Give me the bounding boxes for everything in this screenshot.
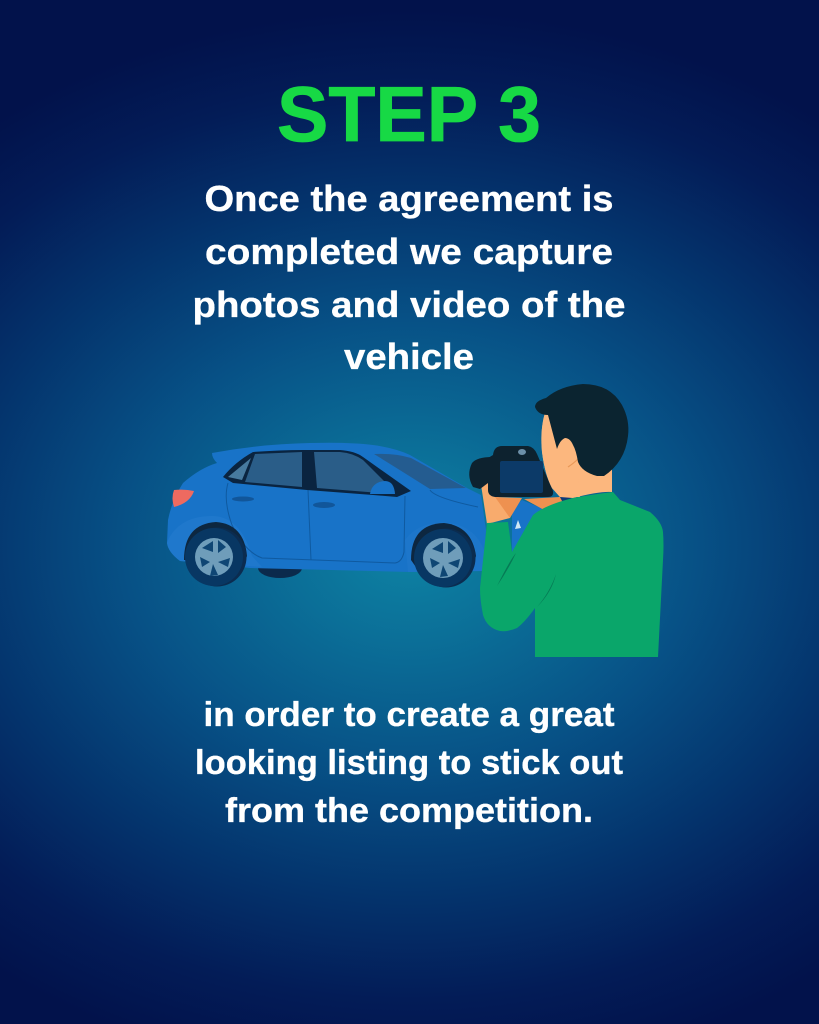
neck shadow: [524, 497, 564, 511]
blue shirt under arm: [512, 500, 546, 552]
rear light: [172, 490, 194, 507]
rear wheel: [184, 522, 247, 586]
title: STEP 3: [277, 70, 541, 158]
hand: [480, 472, 510, 524]
hair: [535, 384, 628, 476]
text block: closing: from the competition.: [225, 792, 593, 830]
shirt collar: [560, 495, 572, 505]
face over camera: [541, 418, 580, 497]
green sweater body: [480, 492, 664, 657]
text block: closing: looking listing to stick out: [195, 744, 623, 782]
hood line: [430, 490, 478, 507]
illustration: photographer: [469, 384, 664, 657]
door panels: [226, 483, 405, 563]
camera: [469, 446, 553, 497]
head and neck: [542, 400, 612, 498]
ear line: [568, 459, 578, 467]
sweater folds: [497, 553, 556, 607]
text block: closing: in order to create a great: [204, 696, 614, 734]
wing mirror: [370, 481, 395, 494]
text block: intro: vehicle: [344, 336, 474, 377]
car body: [167, 443, 486, 572]
body shading: [167, 516, 262, 567]
car underside: [258, 558, 302, 578]
window frame: [223, 450, 411, 497]
windshield: [374, 454, 466, 489]
front side window: [314, 452, 395, 494]
collar highlight: [515, 520, 521, 529]
illustration: blue car: [167, 443, 486, 588]
text block: closing: [195, 696, 623, 830]
door handles: [232, 496, 254, 502]
rear side window: [245, 452, 302, 487]
text block: intro: completed we capture: [205, 231, 613, 272]
text block: intro: [192, 178, 626, 377]
text block: intro: photos and video of the: [192, 284, 626, 325]
text block: intro: Once the agreement is: [204, 178, 614, 219]
front wheel: [411, 523, 476, 588]
